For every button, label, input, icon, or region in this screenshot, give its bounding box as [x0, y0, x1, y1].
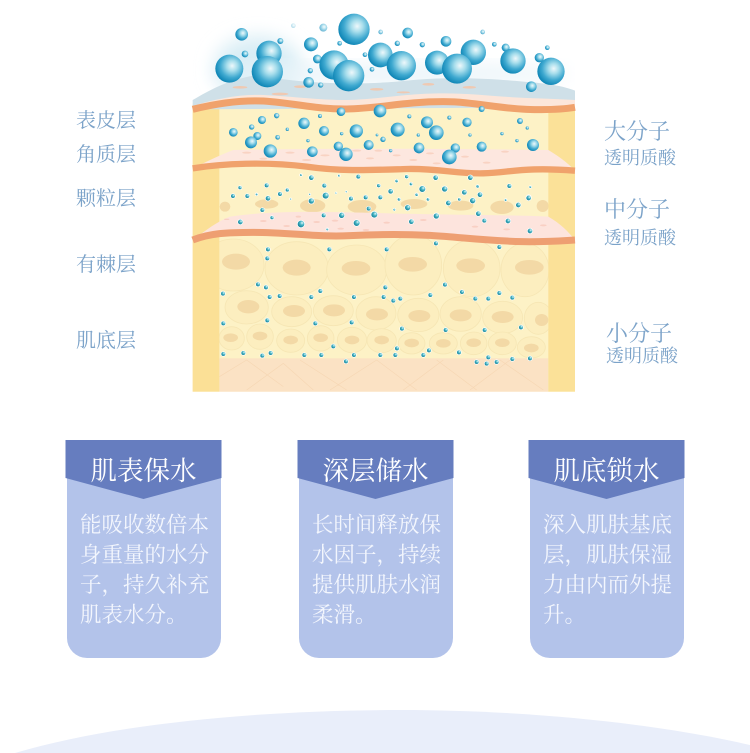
label: 中分子透明质酸: 透明质酸	[604, 228, 676, 248]
label: 中分子透明质酸: 中分子	[604, 197, 670, 222]
top orange band	[193, 101, 575, 110]
second orange band	[193, 164, 575, 173]
yellow base	[193, 103, 575, 392]
label: 大分子透明质酸: 大分子	[604, 119, 670, 144]
label: 大分子透明质酸	[604, 119, 676, 168]
card: 肌表保水	[66, 440, 222, 658]
label: 有棘层: 有棘层	[76, 254, 136, 276]
stratum corneum	[193, 75, 575, 109]
small bubbles	[231, 174, 532, 200]
skin diagram	[192, 14, 576, 392]
card shape	[66, 440, 222, 658]
top pink band	[193, 93, 575, 110]
third orange band	[193, 232, 575, 242]
label: 肌底层: 肌底层	[76, 330, 136, 352]
cell layers	[203, 235, 552, 358]
second pink dashes	[242, 150, 509, 164]
skin layers	[193, 75, 575, 392]
label: 颗粒层: 颗粒层	[76, 188, 136, 210]
card shape	[528, 440, 684, 658]
second pink band	[193, 149, 575, 173]
third pink band	[193, 212, 575, 242]
deep small bubbles	[221, 195, 533, 366]
card heading: 深层储水	[322, 456, 428, 486]
card body: 长时间释放保水因子，持续提供肌肤水润柔滑。	[312, 513, 441, 627]
card shape	[298, 440, 454, 658]
background arc	[16, 710, 750, 753]
label: 小分子透明质酸: 小分子	[606, 321, 672, 346]
label: 角质层: 角质层	[76, 144, 136, 166]
card body: 深入肌肤基底层，肌肤保湿力由内而外提升。	[543, 513, 672, 627]
card heading: 肌表保水	[90, 456, 196, 486]
label: 中分子透明质酸	[604, 197, 676, 248]
card: 肌底锁水	[528, 440, 684, 658]
basal skin zone	[219, 358, 548, 392]
large bubbles	[215, 14, 565, 92]
medium bubbles	[229, 105, 539, 164]
corneum dashes	[233, 83, 476, 95]
label: 表皮层: 表皮层	[76, 110, 136, 132]
sky glow	[208, 30, 538, 88]
label: 小分子透明质酸	[606, 321, 678, 366]
card body: 能吸收数倍本身重量的水分子，持久补充肌表水分。	[80, 513, 209, 627]
card: 深层储水	[298, 440, 454, 658]
label: 小分子透明质酸: 透明质酸	[606, 346, 678, 366]
nuclei	[220, 199, 549, 352]
third pink dashes	[224, 216, 547, 231]
card heading: 肌底锁水	[554, 456, 660, 486]
side bars	[193, 107, 575, 392]
label: 大分子透明质酸: 透明质酸	[604, 148, 676, 168]
